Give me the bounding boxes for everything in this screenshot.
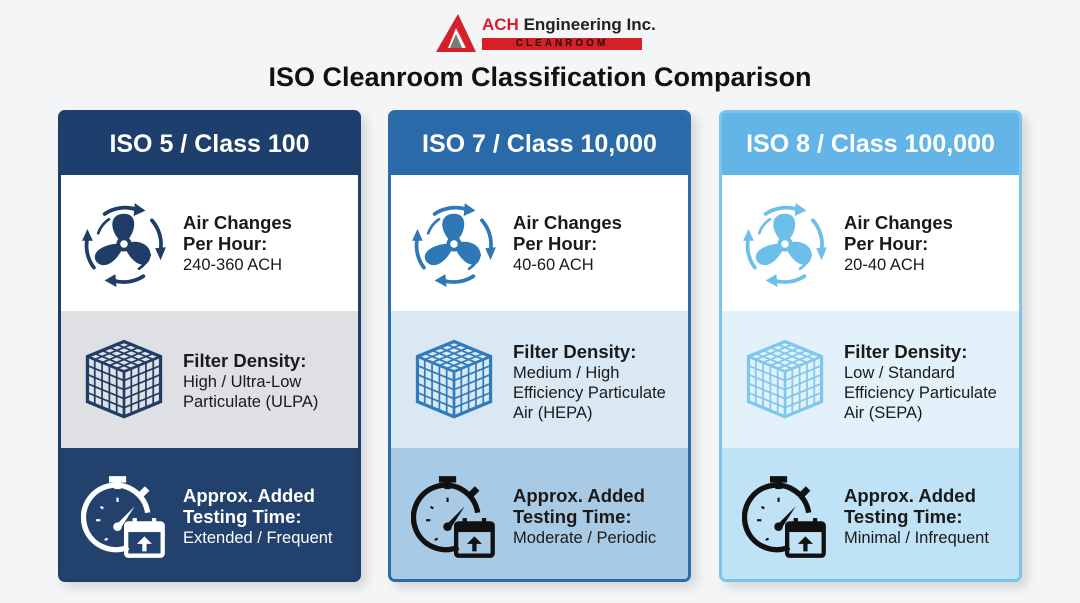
section: air changes: 40-60 ACH (513, 256, 594, 274)
section: air changes: Per Hour: (513, 233, 597, 254)
header: ISO 7 / Class 10,000 (422, 130, 657, 158)
section: testing time: Testing Time: (844, 506, 963, 527)
logo text: ACH Engineering Inc. (482, 15, 656, 34)
section: testing time: Approx. Added (183, 485, 315, 506)
section: filter density: Filter Density: (183, 350, 306, 371)
section: testing time: Testing Time: (183, 506, 302, 527)
panel: ISO 8 (719, 110, 1022, 582)
section: testing time: Minimal / Infrequent (844, 529, 989, 547)
section: filter density (61, 311, 358, 448)
section: filter density: Efficiency Particulate (513, 384, 666, 402)
section: testing time: Approx. Added (513, 485, 645, 506)
section: filter density: Filter Density: (513, 341, 636, 362)
section: air changes (722, 175, 1019, 311)
panel: ISO 7 (388, 110, 691, 582)
section: filter density: Medium / High (513, 364, 619, 382)
section: filter density: Particulate (ULPA) (183, 393, 318, 411)
section: filter density: Filter Density: (844, 341, 967, 362)
header (722, 113, 1019, 175)
section: testing time: Approx. Added (844, 485, 976, 506)
section: air changes: Per Hour: (183, 233, 267, 254)
section: air changes: Air Changes (183, 212, 292, 233)
section: air changes: Air Changes (844, 212, 953, 233)
header: ISO 5 / Class 100 (109, 130, 310, 158)
header (391, 113, 688, 175)
section: testing time: Extended / Frequent (183, 529, 333, 547)
section: air changes (391, 175, 688, 311)
section: filter density (391, 311, 688, 448)
section: filter density: Efficiency Particulate (844, 384, 997, 402)
logo: CLEANROOM (516, 38, 608, 49)
panel: ISO 5 (58, 110, 361, 582)
section: filter density: Air (SEPA) (844, 404, 923, 422)
section: air changes: 240-360 ACH (183, 256, 282, 274)
section: air changes: 20-40 ACH (844, 256, 925, 274)
section: filter density: Air (HEPA) (513, 404, 592, 422)
section: air changes: Air Changes (513, 212, 622, 233)
section: air changes (61, 175, 358, 311)
section: testing time (391, 448, 688, 588)
icon: red triangle (436, 14, 476, 52)
section: filter density: Low / Standard (844, 364, 955, 382)
title: ISO Cleanroom Classification Comparison (268, 62, 812, 92)
section: testing time: Testing Time: (513, 506, 632, 527)
section: testing time (722, 448, 1019, 588)
header (61, 113, 358, 175)
logo (436, 14, 656, 52)
section: testing time: Moderate / Periodic (513, 529, 656, 547)
section: filter density: High / Ultra-Low (183, 373, 301, 391)
section: testing time (61, 448, 358, 588)
section: air changes: Per Hour: (844, 233, 928, 254)
header: ISO 8 / Class 100,000 (746, 130, 995, 158)
section: filter density (722, 311, 1019, 448)
